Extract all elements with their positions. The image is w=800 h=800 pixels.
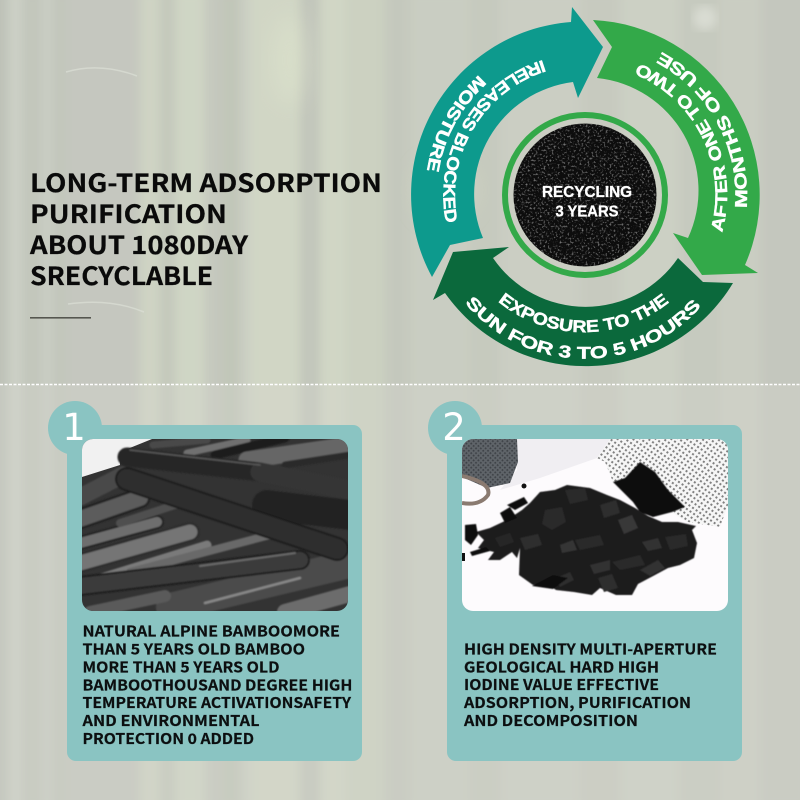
recycling wheel xyxy=(411,7,760,366)
arrow: after one to two months of use: MONTHS OF USE xyxy=(656,52,748,207)
centre badge xyxy=(505,115,665,275)
badge 2: 2 xyxy=(442,406,466,449)
section divider xyxy=(0,384,800,386)
card 1: natural bamboo xyxy=(48,401,362,761)
card 1 description xyxy=(81,621,353,749)
heading: PURIFICATION xyxy=(30,195,227,231)
card 1 description: TEMPERATURE ACTIVATIONSAFETY xyxy=(82,692,351,713)
arrow: releases blocked moisture xyxy=(411,7,603,277)
card 2 description xyxy=(463,638,717,731)
card 1 description: AND ENVIRONMENTAL xyxy=(81,710,260,731)
badge 1: 1 xyxy=(62,406,86,449)
card 2 description: AND DECOMPOSITION xyxy=(463,710,638,731)
card 1 description: NATURAL ALPINE BAMBOOMORE xyxy=(82,621,340,642)
card 2 description: HIGH DENSITY MULTI-APERTURE xyxy=(464,638,717,659)
arrow: after one to two months of use xyxy=(593,20,760,275)
arrow: releases blocked moisture: IRELEASES BLOCKED xyxy=(443,60,546,222)
heading: LONG-TERM ADSORPTION xyxy=(30,164,382,200)
heading: ABOUT 1080DAY xyxy=(29,226,249,262)
card 2 description: IODINE VALUE EFFECTIVE xyxy=(464,674,659,695)
arrow: exposure to the sun xyxy=(433,247,733,366)
photo: charcoal granules and mesh bags xyxy=(462,439,728,611)
badge 2 xyxy=(428,401,482,455)
centre badge: RECYCLING xyxy=(542,184,632,201)
photo: charcoal bamboo sticks xyxy=(80,438,350,612)
heading: SRECYCLABLE xyxy=(30,257,213,293)
arrow: exposure to the sun: EXPOSURE TO THE xyxy=(498,292,670,333)
badge 1 xyxy=(48,401,102,455)
card 2: high density charcoal xyxy=(428,401,742,761)
card 1 description: PROTECTION 0 ADDED xyxy=(82,728,254,749)
heading underline xyxy=(30,317,91,319)
card 1 description: MORE THAN 5 YEARS OLD xyxy=(82,656,280,678)
card 1 description: THAN 5 YEARS OLD BAMBOO xyxy=(82,639,305,660)
arrow: releases blocked moisture: MOISTURE xyxy=(426,75,486,172)
heading xyxy=(29,164,382,293)
card 2 description: GEOLOGICAL HARD HIGH xyxy=(464,656,659,677)
card 1 description: BAMBOOTHOUSAND DEGREE HIGH xyxy=(82,674,352,695)
centre badge: 3 YEARS xyxy=(556,204,618,220)
arrow: after one to two months of use: AFTER ONE TO TWO xyxy=(636,65,728,232)
card 2 description: ADSORPTION, PURIFICATION xyxy=(463,692,691,713)
arrow: exposure to the sun: SUN FOR 3 TO 5 HOURS xyxy=(466,297,700,359)
